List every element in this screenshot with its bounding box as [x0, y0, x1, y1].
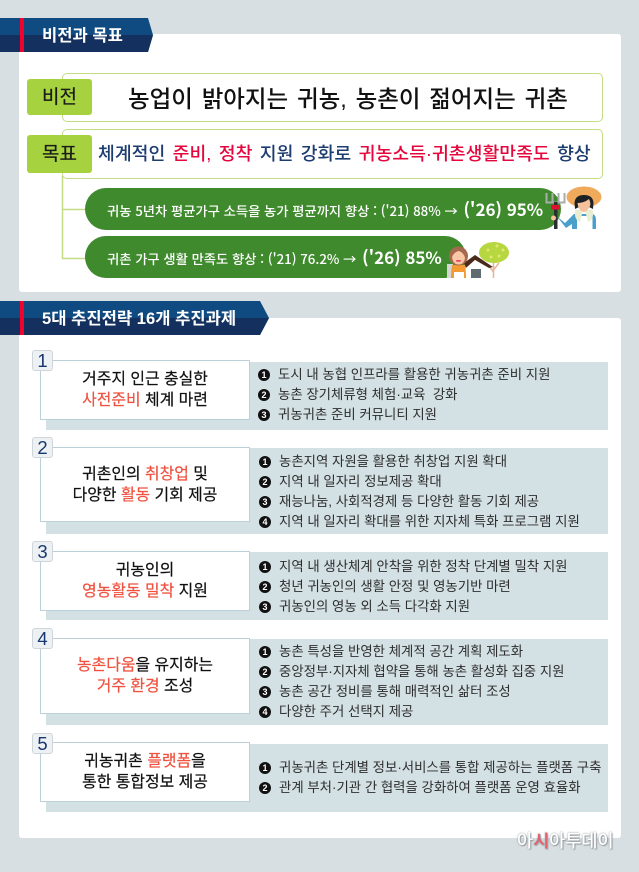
strategy 4 tasks: 2 [262, 666, 268, 676]
strategy 5 tasks: 2 [262, 782, 268, 792]
strategy 3 [32, 541, 608, 620]
strategy 2 tasks: 1 [262, 456, 268, 466]
goal statement: 체계적인 준비, 정착 지원 강화로 귀농소득·귀촌생활만족도 향상 [98, 143, 591, 164]
heading: strategies: 5대 추진전략 16개 추진과제 [42, 309, 236, 328]
strategy 3 tasks [259, 559, 567, 614]
vision statement: 농업이 밝아지는 귀농, 농촌이 젊어지는 귀촌 [128, 86, 568, 112]
strategy 5 title card: 귀농귀촌 플랫폼을 [84, 753, 206, 770]
strategy 3 title card [40, 551, 250, 611]
strategy 5 [32, 733, 608, 812]
strategy 3 background [46, 552, 608, 620]
goal label: 목표 [42, 144, 77, 165]
strategy 3 number: 3 [37, 541, 48, 562]
strategy 1 tasks: 2 [261, 390, 266, 400]
strategy 2 number: 2 [37, 437, 48, 458]
strategy 5 tasks [259, 760, 601, 795]
goal label [27, 135, 92, 173]
strategy 2 title card [40, 447, 250, 522]
strategy 3 tasks: 청년 귀농인의 생활 안정 및 영농기반 마련 [279, 579, 511, 594]
strategy 1 title card: 사전준비 체계 마련 [82, 392, 208, 409]
strategy 4 tasks: 3 [262, 686, 268, 696]
vision box [62, 73, 603, 122]
panel: vision and goals [19, 34, 621, 292]
strategy 3 tasks: 3 [262, 602, 268, 612]
strategy 1 tasks: 도시 내 농협 인프라를 활용한 귀농귀촌 준비 지원 [278, 367, 550, 382]
strategy 2 [32, 437, 608, 534]
strategy 2 background [46, 448, 608, 534]
strategy 3 tasks: 지역 내 생산체계 안착을 위한 정착 단계별 밀착 지원 [279, 559, 567, 574]
strategy 1 number: 1 [37, 350, 48, 371]
strategy 1 number [32, 350, 53, 371]
goal box [62, 129, 603, 179]
strategy 2 tasks: 3 [262, 496, 268, 506]
strategy 4 [32, 628, 608, 725]
strategy 1 tasks: 농촌 장기체류형 체험·교육 강화 [278, 387, 458, 402]
strategy 2 tasks: 지역 내 일자리 정보제공 확대 [279, 474, 442, 489]
strategy 5 tasks: 1 [262, 762, 268, 772]
strategy 4 number: 4 [37, 628, 48, 649]
strategy 1 title card: 거주지 인근 충실한 [82, 371, 208, 388]
strategy 2 tasks: 농촌지역 자원을 활용한 취창업 지원 확대 [279, 454, 507, 469]
panel: strategies [19, 318, 621, 838]
vision label: 비전 [42, 87, 77, 108]
strategy 3 tasks: 귀농인의 영농 외 소득 다각화 지원 [279, 599, 470, 614]
strategy 5 tasks: 귀농귀촌 단계별 정보·서비스를 통합 제공하는 플랫폼 구축 [279, 760, 601, 775]
icon: woman and house with tree [447, 242, 509, 278]
strategy 4 tasks: 4 [262, 706, 268, 716]
strategy 2 tasks: 재능나눔, 사회적경제 등 다양한 활동 기회 제공 [279, 494, 539, 509]
strategy 4 tasks: 중앙정부·지자체 협약을 통해 농촌 활성화 집중 지원 [279, 664, 564, 679]
strategy 4 tasks: 1 [262, 646, 268, 656]
strategy 3 title card: 귀농인의 [116, 562, 174, 579]
strategy 5 title card [40, 742, 250, 802]
strategy 4 title card [40, 638, 250, 714]
heading: vision and goals: 비전과 목표 [42, 26, 123, 45]
strategy 4 background [46, 639, 608, 725]
vision label [27, 79, 92, 115]
strategy 5 tasks: 관계 부처·기관 간 협력을 강화하여 플랫폼 운영 효율화 [279, 780, 581, 795]
strategy 2 tasks [259, 454, 580, 529]
target pill: income [85, 188, 561, 230]
strategy 4 number [32, 628, 53, 649]
strategy 1 tasks: 1 [261, 370, 266, 380]
strategy 4 tasks [259, 644, 564, 719]
strategy 2 number [32, 437, 53, 458]
connector lines [62, 176, 86, 260]
strategy 5 background [46, 744, 608, 812]
strategy 4 title card: 거주 환경 조성 [97, 678, 193, 695]
strategy 3 tasks: 1 [262, 562, 268, 572]
strategy 1 tasks: 3 [261, 410, 266, 420]
strategy 2 title card: 다양한 활동 기회 제공 [73, 486, 217, 504]
strategy 1 tasks [258, 367, 550, 422]
strategy 2 tasks: 지역 내 일자리 확대를 위한 지자체 특화 프로그램 지원 [279, 514, 580, 529]
target pill: income: 귀농 5년차 평균가구 소득을 농가 평균까지 향상 : ('21) 88% → ('26) 95% [107, 196, 543, 221]
strategy 4 tasks: 농촌 공간 정비를 통해 매력적인 삶터 조성 [279, 684, 511, 699]
strategy 5 number: 5 [37, 733, 48, 754]
strategy 2 title card: 귀촌인의 취창업 및 [82, 466, 208, 482]
strategy 3 title card: 영농활동 밀착 지원 [82, 583, 208, 600]
icon: farmer with pitchfork [546, 186, 602, 229]
strategy 4 tasks: 농촌 특성을 반영한 체계적 공간 계획 제도화 [279, 644, 523, 659]
strategy 2 tasks: 2 [262, 476, 268, 486]
strategy 3 number [32, 541, 53, 562]
strategy 2 tasks: 4 [262, 516, 268, 526]
strategy 1 title card [40, 360, 250, 420]
strategy 1 [32, 350, 608, 430]
heading: vision and goals [0, 18, 153, 52]
target pill: satisfaction [85, 236, 466, 278]
strategy 1 tasks: 귀농귀촌 준비 커뮤니티 지원 [278, 407, 437, 422]
strategy 1 background [46, 362, 608, 430]
strategy 5 title card: 통한 통합정보 제공 [82, 774, 208, 791]
target pill: satisfaction: 귀촌 가구 생활 만족도 향상 : ('21) 76.2% → ('26) 85% [107, 244, 442, 269]
strategy 3 tasks: 2 [262, 582, 268, 592]
strategy 5 number [32, 733, 53, 754]
strategy 4 tasks: 다양한 주거 선택지 제공 [279, 704, 413, 719]
strategy 4 title card: 농촌다움을 유지하는 [77, 657, 213, 674]
heading: strategies [0, 301, 269, 335]
watermark: 아시아투데이 [517, 831, 614, 851]
